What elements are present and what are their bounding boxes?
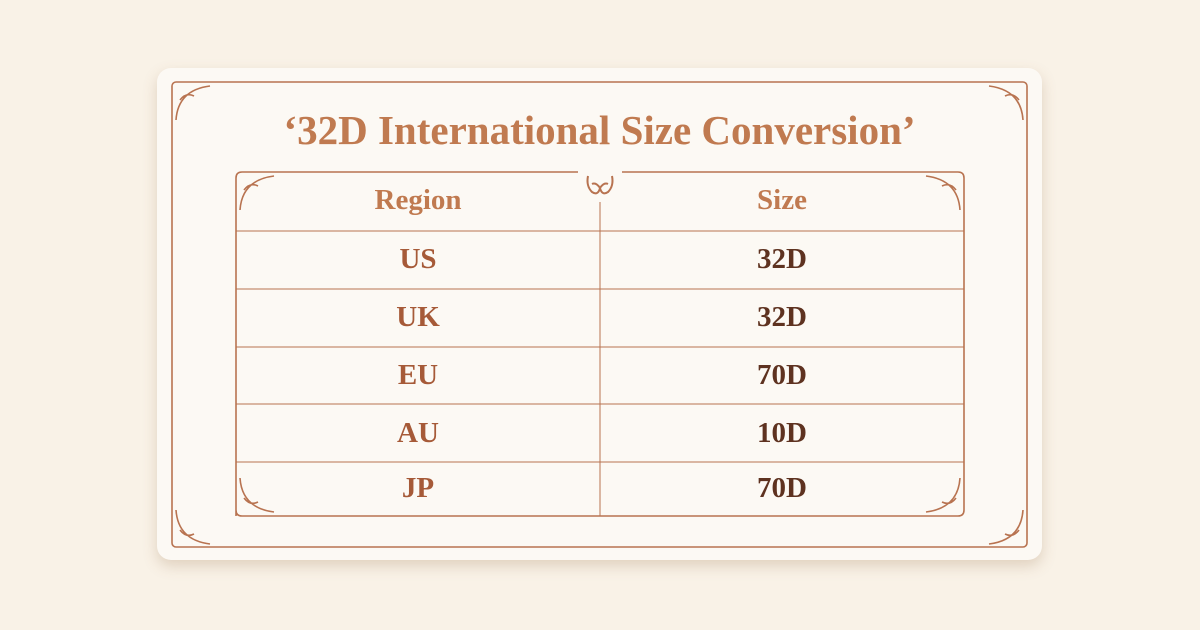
rows: 70D bbox=[757, 472, 807, 504]
icon: bra bbox=[588, 176, 612, 193]
rows: US bbox=[399, 243, 437, 275]
rows: 32D bbox=[757, 243, 807, 275]
rows: UK bbox=[396, 301, 440, 333]
card panel bbox=[157, 68, 1042, 560]
rows: 10D bbox=[757, 417, 807, 449]
rows: AU bbox=[397, 417, 439, 449]
header: Size: Size bbox=[757, 184, 807, 216]
rows: EU bbox=[398, 359, 438, 391]
rows bbox=[396, 243, 807, 504]
header: Region: Region bbox=[374, 184, 462, 216]
title: ‘32D International Size Conversion’ bbox=[283, 107, 916, 153]
rows: 32D bbox=[757, 301, 807, 333]
rows: 70D bbox=[757, 359, 807, 391]
rows: JP bbox=[402, 472, 434, 504]
